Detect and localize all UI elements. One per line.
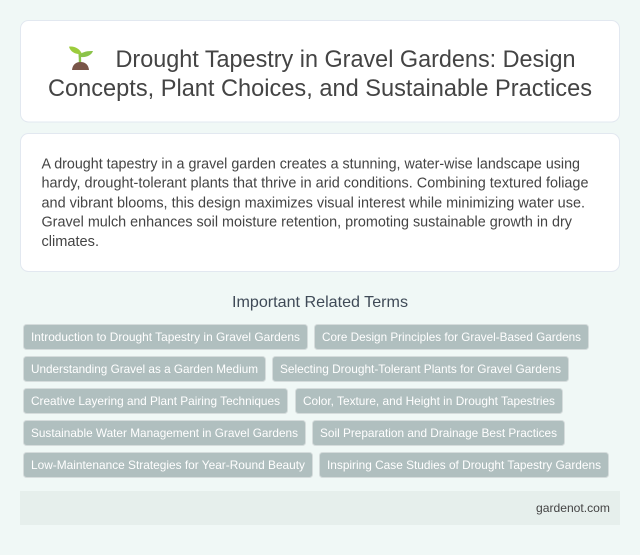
tag: [296, 388, 562, 414]
panel: title card: [20, 20, 620, 122]
tag: Core Design Principles for Gravel-Based Gardens: [322, 330, 581, 344]
related terms tags: [24, 324, 608, 478]
tag: [24, 388, 288, 414]
tag: Introduction to Drought Tapestry in Gravel Gardens: [31, 330, 300, 344]
tag: [320, 452, 608, 478]
tag: Soil Preparation and Drainage Best Practices: [320, 426, 557, 440]
tag: [24, 420, 306, 446]
tag: Selecting Drought-Tolerant Plants for Gravel Gardens: [280, 362, 561, 376]
summary paragraph: [42, 156, 588, 250]
title line 2: Concepts, Plant Choices, and Sustainable Practices: [48, 75, 592, 102]
tag: [272, 356, 568, 382]
panel: summary card: [20, 134, 620, 272]
summary paragraph: climates.: [42, 234, 99, 250]
icon: sprout: [69, 47, 93, 70]
tag: Low-Maintenance Strategies for Year-Round Beauty: [31, 458, 305, 472]
tag: [314, 324, 588, 350]
footer bar: [20, 491, 620, 525]
tag: [24, 452, 312, 478]
summary paragraph: A drought tapestry in a gravel garden creates a stunning, water-wise landscape using: [42, 156, 580, 172]
title line 1: Drought Tapestry in Gravel Gardens: Design: [116, 46, 576, 73]
tag: Creative Layering and Plant Pairing Techniques: [31, 394, 280, 408]
tag: Understanding Gravel as a Garden Medium: [31, 362, 258, 376]
heading: important related terms: Important Related Terms: [232, 294, 408, 311]
footer site name: gardenot.com: [536, 501, 610, 515]
tag: [312, 420, 564, 446]
tag: Sustainable Water Management in Gravel Gardens: [31, 426, 298, 440]
summary paragraph: and vibrant blooms, this design maximizes visual interest while minimizing water use.: [42, 195, 585, 211]
tag: Color, Texture, and Height in Drought Tapestries: [303, 394, 555, 408]
tag: [24, 324, 308, 350]
tag: Inspiring Case Studies of Drought Tapestry Gardens: [327, 458, 601, 472]
summary paragraph: Gravel mulch enhances soil moisture retention, promoting sustainable growth in dry: [42, 215, 573, 231]
summary paragraph: hardy, drought-tolerant plants that thrive in arid conditions. Combining textured foliage: [42, 176, 588, 192]
tag: [24, 356, 266, 382]
